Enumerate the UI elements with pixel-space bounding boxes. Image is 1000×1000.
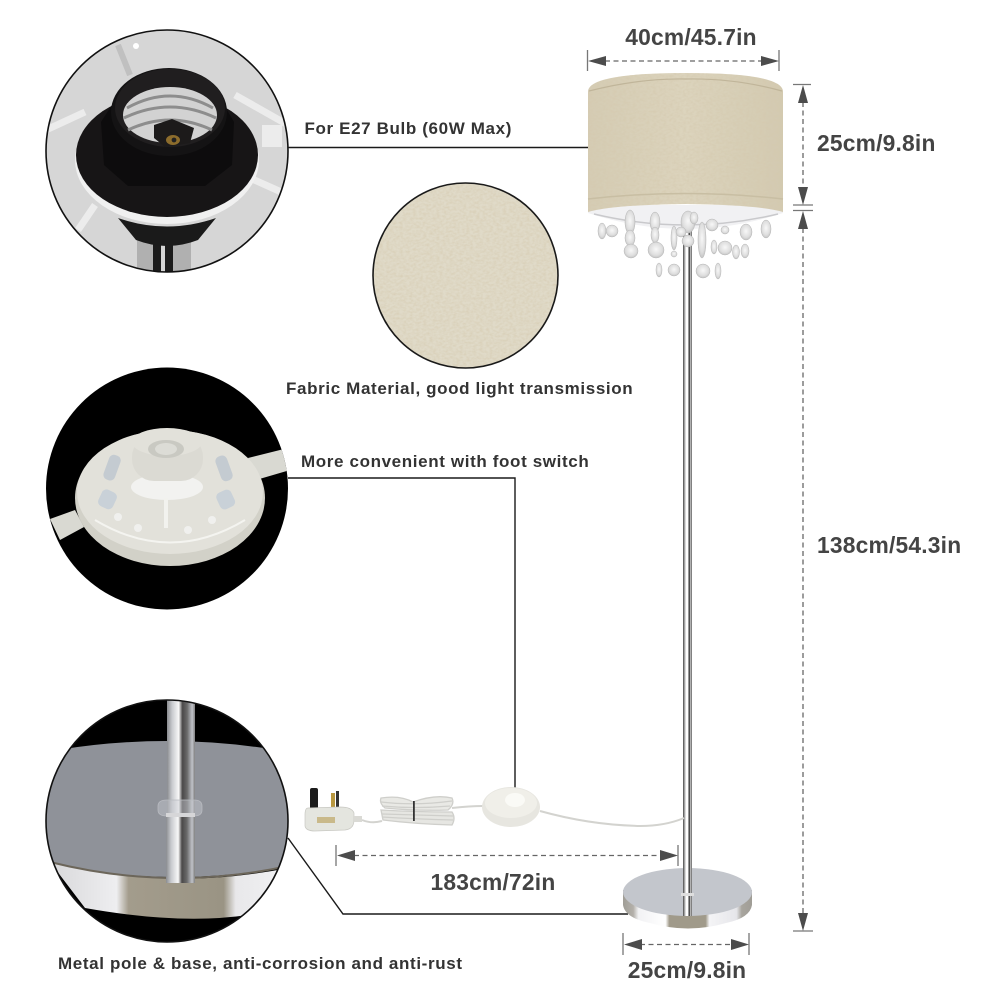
dimension: cord length: 183cm/72in [431,869,555,895]
dimension: shade height [793,84,936,205]
lamp base [623,850,752,928]
in-line foot switch [482,787,540,827]
power cord with plug and foot switch [305,787,684,831]
detail circle: metal base [46,700,288,942]
dimension: lamp height: 138cm/54.3in [817,532,961,558]
cord [362,806,684,826]
callout: metal pole and base: Metal pole & base, anti-corrosion and anti-rust [58,954,463,973]
callout: fabric material: Fabric Material, good light transmission [286,379,633,398]
lamp shade [588,73,783,229]
callout: metal pole and base [58,838,628,973]
dimension: base width: 25cm/9.8in [628,957,746,983]
dimension: shade width [588,24,779,71]
callout: E27 bulb: For E27 Bulb (60W Max) [304,119,512,138]
dimension: cord length [336,845,678,895]
dimension: shade height: 25cm/9.8in [817,130,936,156]
lamp pole [683,215,692,905]
dimension: lamp height [793,210,961,931]
hanging crystals [598,210,771,279]
callout: foot switch: More convenient with foot switch [301,452,589,471]
dimension: shade width: 40cm/45.7in [625,24,757,50]
plug [305,788,362,831]
detail circle: E27 socket [46,30,288,276]
coiled cord [380,797,454,825]
floor lamp [588,73,783,928]
detail circle: fabric swatch [373,183,558,368]
dimension: base width [623,933,749,983]
callout: foot switch [288,452,589,795]
detail circle: foot switch [46,368,290,610]
